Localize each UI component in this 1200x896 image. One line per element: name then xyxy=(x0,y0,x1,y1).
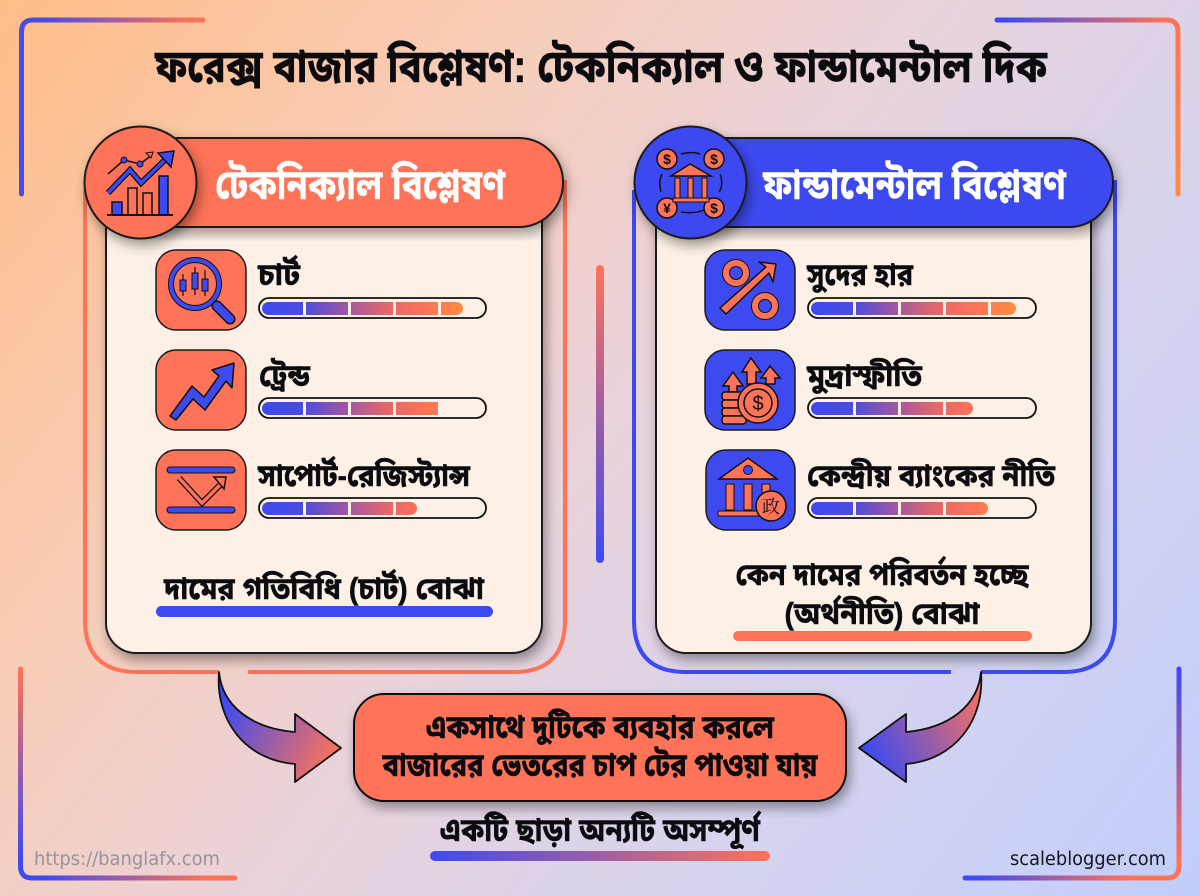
closing statement: একটি ছাড়া অন্যটি অসম্পূর্ণ xyxy=(440,811,762,850)
icon: percent arrow xyxy=(705,250,795,330)
progress bar xyxy=(808,498,1036,518)
outer frame xyxy=(634,180,1115,672)
header text: টেকনিক্যাল বিশ্লেষণ xyxy=(215,160,505,208)
icon: trend arrow xyxy=(156,350,246,430)
progress bar xyxy=(259,398,486,418)
icon: central bank xyxy=(706,450,795,530)
card xyxy=(656,190,1091,653)
header text: ফান্ডামেন্টাল বিশ্লেষণ xyxy=(762,160,1066,208)
caption underline xyxy=(156,606,493,617)
outer frame xyxy=(85,180,565,672)
icon: coins and arrows: $ xyxy=(752,393,764,415)
source url: https://banglafx.com xyxy=(34,848,220,870)
header pill xyxy=(100,138,563,227)
corner frame: top right xyxy=(997,20,1178,194)
icon: bank and currencies badge xyxy=(634,126,746,238)
panel: technical analysis xyxy=(84,126,565,672)
arrow: fundamental to conclusion xyxy=(859,672,981,782)
title: ফরেক্স বাজার বিশ্লেষণ: টেকনিক্যাল ও ফান্ডামেন্টাল দিক xyxy=(154,40,1047,92)
icon: coins and arrows xyxy=(705,350,795,430)
label: চার্ট xyxy=(257,254,301,292)
row: trend xyxy=(156,350,486,430)
center divider xyxy=(596,265,604,563)
label: কেন্দ্রীয় ব্যাংকের নীতি xyxy=(807,457,1056,493)
label: মুদ্রাস্ফীতি xyxy=(806,357,923,394)
caption line 1: কেন দামের পরিবর্তন হচ্ছে xyxy=(736,555,1029,592)
icon: bank and currencies badge: $ xyxy=(663,151,671,167)
card xyxy=(106,190,542,653)
icon: central bank: 政 xyxy=(762,493,780,519)
brand: scaleblogger.com xyxy=(1010,849,1166,870)
progress bar xyxy=(808,298,1036,318)
row: central bank policy xyxy=(706,450,1056,530)
row: support-resistance xyxy=(156,450,486,530)
icon: bank and currencies badge: $ xyxy=(710,151,718,167)
caption line 2: (অর্থনীতি) বোঝা xyxy=(784,594,981,631)
icon: candlestick magnifier xyxy=(156,250,246,330)
row: chart xyxy=(156,250,486,330)
icon: rising chart badge xyxy=(84,126,196,238)
header pill xyxy=(650,138,1113,227)
row: inflation xyxy=(705,350,1036,430)
caption: দামের গতিবিধি (চার্ট) বোঝা xyxy=(163,568,485,606)
row: interest rate xyxy=(705,250,1036,330)
caption underline xyxy=(733,631,1032,641)
callout line 1: একসাথে দুটিকে ব্যবহার করলে xyxy=(426,709,775,746)
label: সুদের হার xyxy=(806,257,913,293)
closing underline xyxy=(430,851,770,861)
label: ট্রেন্ড xyxy=(259,357,310,393)
corner frame: bottom right xyxy=(965,669,1179,878)
callout: conclusion xyxy=(354,694,846,801)
progress bar xyxy=(808,398,1036,418)
icon: support and resistance xyxy=(156,450,246,530)
icon: bank and currencies badge: ¥ xyxy=(663,200,671,216)
label: সাপোর্ট-রেজিস্ট্যান্স xyxy=(257,455,471,493)
icon: bank and currencies badge: $ xyxy=(710,200,718,216)
corner frame: top left xyxy=(22,20,203,194)
panel: fundamental analysis xyxy=(634,126,1115,672)
progress bar xyxy=(259,298,486,318)
progress bar xyxy=(259,498,486,518)
arrow: technical to conclusion xyxy=(219,672,341,782)
corner frame: bottom left xyxy=(20,669,235,878)
callout line 2: বাজারের ভেতরের চাপ টের পাওয়া যায় xyxy=(382,747,819,783)
